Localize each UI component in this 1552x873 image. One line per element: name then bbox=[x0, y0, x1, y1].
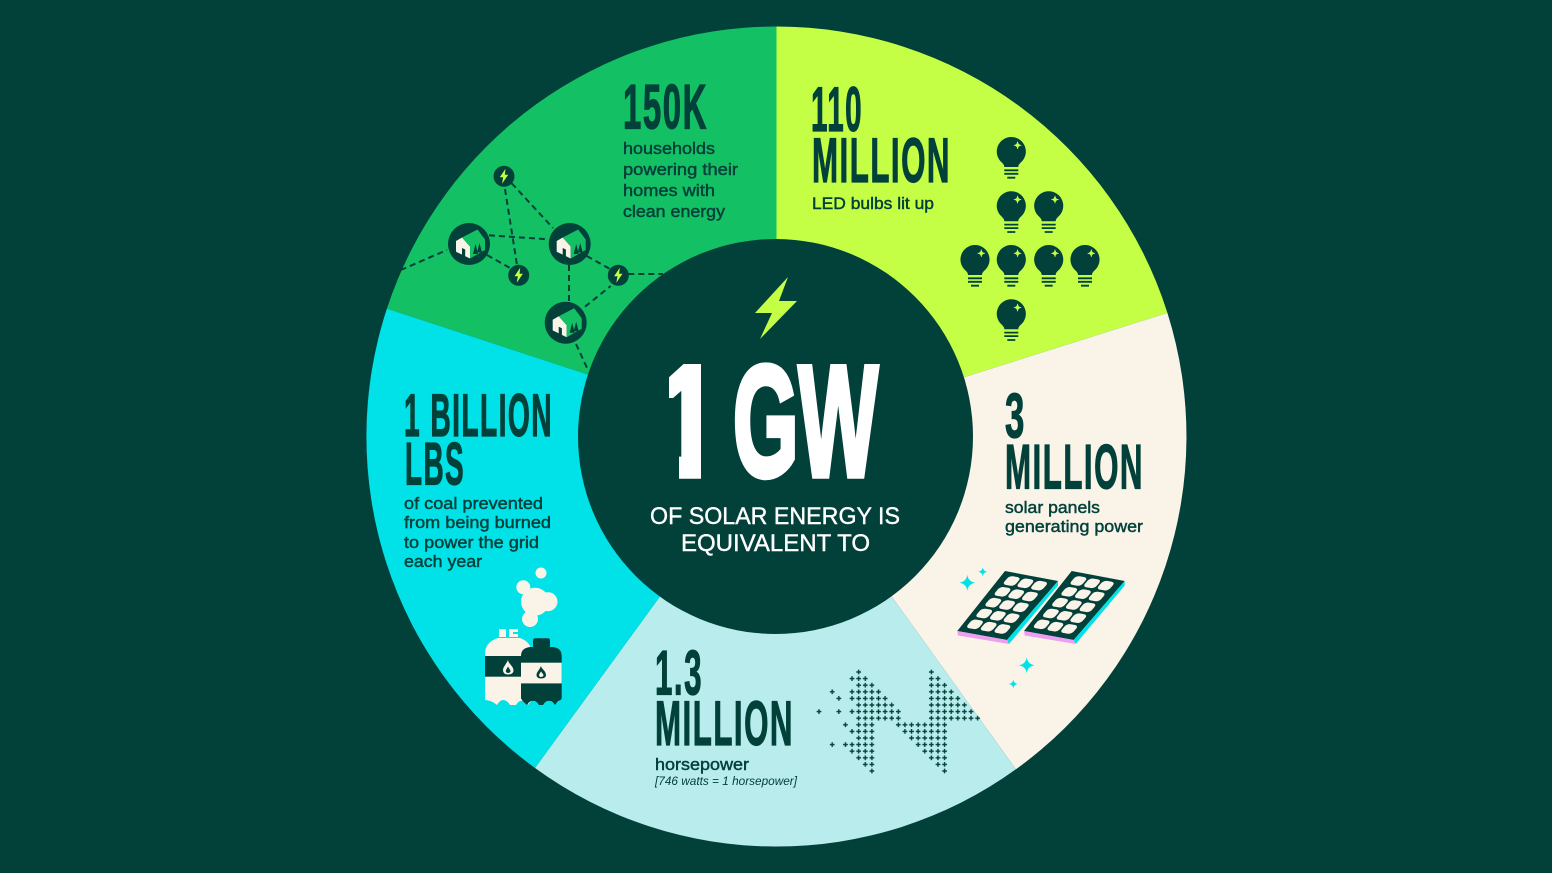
stat: 110 million LED bulbs: 110 bbox=[811, 75, 863, 145]
stat: 3 million solar panels bbox=[1005, 382, 1144, 536]
stat: 1.3 million horsepower: horsepower bbox=[655, 755, 749, 774]
stat: 1.3 million horsepower: 1.3 bbox=[655, 638, 703, 708]
subtitle: EQUIVALENT TO bbox=[681, 530, 870, 557]
stat: 3 million solar panels: generating power bbox=[1005, 517, 1143, 536]
subtitle bbox=[650, 503, 900, 557]
stat: 150K households: households bbox=[623, 139, 715, 158]
icon: house network bbox=[401, 166, 663, 370]
segment: LED bulbs bbox=[776, 26, 1167, 436]
stat: 150K households: 150K bbox=[623, 72, 708, 142]
stat: 150K households: homes with bbox=[623, 181, 715, 200]
icon: solar panels bbox=[957, 567, 1125, 688]
stat: 1 billion lbs coal: LBS bbox=[405, 430, 465, 498]
text: MILLION bbox=[812, 126, 951, 196]
segment: solar panels bbox=[776, 313, 1186, 769]
stat: 3 million solar panels: solar panels bbox=[1005, 498, 1100, 517]
stat: 1.3 million horsepower bbox=[654, 638, 798, 788]
center circle bbox=[578, 239, 973, 634]
title: 1 GW: GW bbox=[733, 334, 878, 510]
stat: 110 million LED bulbs: LED bulbs lit up bbox=[812, 194, 934, 213]
stat: 150K households: powering their bbox=[623, 160, 738, 179]
segment: coal bbox=[366, 309, 776, 768]
stat: 150K households bbox=[623, 72, 738, 221]
stat: 110 million LED bulbs bbox=[811, 75, 951, 213]
icon: gas tanks and smoke bbox=[485, 568, 562, 705]
stat: 3 million solar panels: 3 bbox=[1005, 382, 1026, 452]
stat: 1 billion lbs coal: each year bbox=[404, 552, 482, 571]
icon: light bulbs bbox=[960, 137, 1100, 340]
stat: 1 billion lbs coal: to power the grid bbox=[404, 533, 539, 552]
stat: 1.3 million horsepower: [746 watts = 1 horsepower] bbox=[654, 776, 798, 788]
text: 1 BILLION bbox=[404, 382, 553, 449]
stat: 1.3 million horsepower: MILLION bbox=[655, 689, 794, 759]
stat: 1 billion lbs coal: of coal prevented bbox=[404, 494, 543, 513]
segment: households bbox=[387, 26, 776, 437]
title: 1 GW: 1 bbox=[657, 334, 720, 510]
stat: 1 billion lbs coal: from being burned bbox=[404, 513, 551, 532]
subtitle: OF SOLAR ENERGY IS bbox=[650, 503, 900, 530]
segment: horsepower bbox=[535, 436, 1016, 847]
text: MILLION bbox=[1005, 432, 1144, 502]
stat: 150K households: clean energy bbox=[623, 202, 726, 221]
icon: lightning bolt bbox=[755, 277, 797, 339]
icon: dotted lightning bolt bbox=[816, 669, 981, 774]
stat: 1 billion lbs coal bbox=[404, 382, 553, 571]
title: 1 GW bbox=[669, 362, 880, 480]
